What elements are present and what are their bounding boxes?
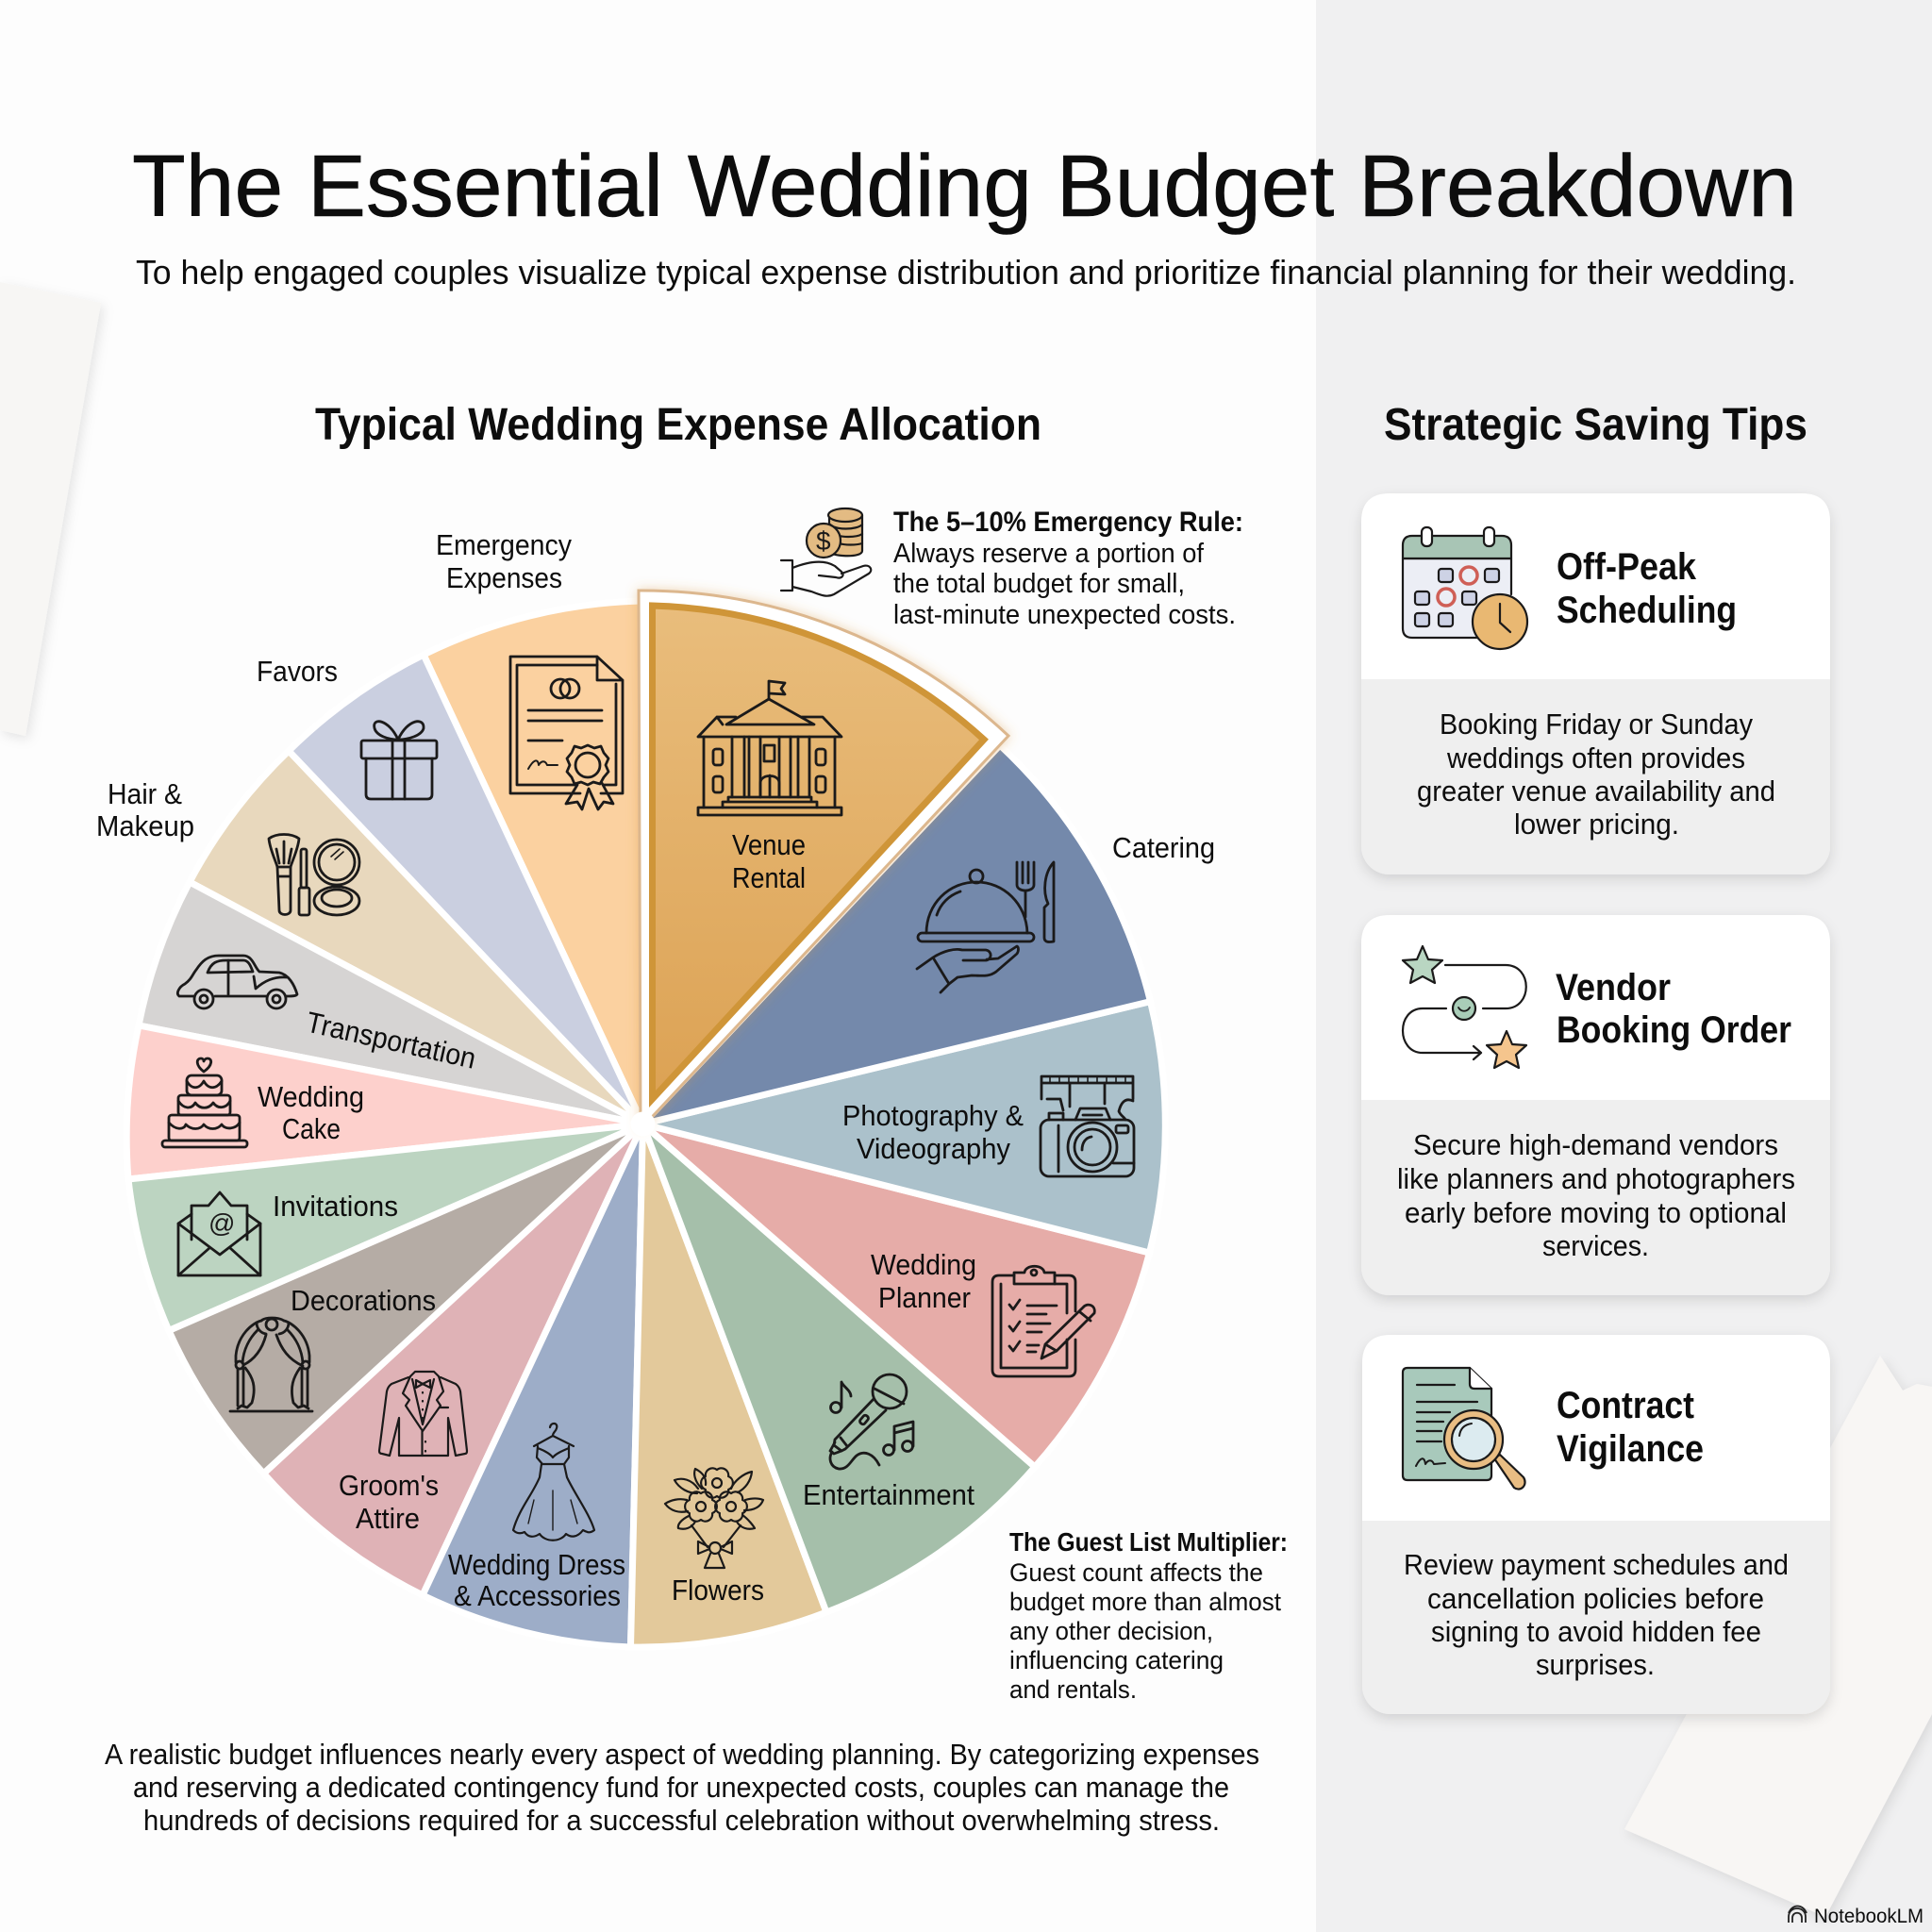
callout: guest list multiplier: Guest count affects the xyxy=(1009,1558,1263,1587)
icon: makeup xyxy=(269,834,359,915)
slice: entertainment xyxy=(643,1124,1035,1612)
label: transportation: Transportation xyxy=(303,1006,479,1075)
icon: invitation envelope xyxy=(178,1192,260,1275)
label: wedding planner xyxy=(871,1248,976,1314)
icon: decorations arch xyxy=(230,1318,312,1411)
slice: favors xyxy=(289,655,643,1124)
card text xyxy=(1417,708,1775,841)
label: hair and makeup xyxy=(96,777,194,842)
card text xyxy=(1404,1548,1789,1681)
label: emergency expenses xyxy=(436,528,572,594)
label: groom's attire: Groom's xyxy=(339,1469,439,1502)
card title: Contract xyxy=(1557,1385,1694,1426)
card title: Vendor xyxy=(1556,967,1671,1008)
icon: vendor path with stars xyxy=(1403,946,1526,1068)
label: hair and makeup: Makeup xyxy=(96,809,194,842)
icon: wedding dress xyxy=(513,1424,594,1541)
icon: bouquet xyxy=(665,1468,763,1568)
card title: Booking Order xyxy=(1557,1009,1791,1051)
panel: off-peak scheduling xyxy=(1361,493,1830,874)
callout: guest list multiplier: influencing catering xyxy=(1009,1646,1224,1674)
icon: venue building xyxy=(698,681,841,815)
footer paragraph xyxy=(105,1738,1259,1837)
label: wedding planner: Wedding xyxy=(871,1248,976,1281)
label: favors: Favors xyxy=(257,655,338,688)
callout: guest list multiplier: The Guest List Multiplier: xyxy=(1009,1527,1288,1557)
label: invitations: Invitations xyxy=(273,1190,398,1223)
paper scrap left xyxy=(0,282,101,736)
callout: emergency rule xyxy=(893,507,1243,630)
card text: greater venue availability and xyxy=(1417,774,1775,808)
title: The Essential Wedding Budget Breakdown xyxy=(132,137,1797,235)
callout: guest list multiplier: budget more than almost xyxy=(1009,1588,1281,1616)
slice: wedding planner xyxy=(643,1124,1149,1467)
icon: invitation envelope: @ xyxy=(208,1208,235,1238)
label: wedding cake: Cake xyxy=(282,1112,341,1145)
callout: emergency rule: last-minute unexpected costs. xyxy=(893,600,1236,630)
card text: signing to avoid hidden fee xyxy=(1431,1615,1761,1648)
icon: coins and hand xyxy=(781,508,871,596)
callout: emergency rule: the total budget for small, xyxy=(893,569,1185,599)
panel: contract vigilance xyxy=(1362,1335,1830,1714)
card title: Scheduling xyxy=(1557,590,1737,631)
label: venue rental: Rental xyxy=(732,861,806,894)
slice: emergency expenses xyxy=(424,601,643,1124)
label: wedding cake: Wedding xyxy=(258,1080,364,1113)
slice: transportation xyxy=(139,882,643,1124)
label: emergency expenses: Emergency xyxy=(436,528,572,561)
subtitle: To help engaged couples visualize typical expense distribution and prioritize financial planning for their wedding. xyxy=(136,253,1796,291)
slice: decorations xyxy=(169,1124,643,1474)
callout: emergency rule: The 5–10% Emergency Rule: xyxy=(893,507,1243,538)
icon: contract and magnifier xyxy=(1403,1368,1525,1490)
label: wedding planner: Planner xyxy=(878,1281,971,1314)
label: groom's attire: Attire xyxy=(356,1502,420,1535)
label: emergency expenses: Expenses xyxy=(446,561,562,594)
label: venue rental xyxy=(732,828,806,894)
card text: lower pricing. xyxy=(1514,808,1679,841)
icon: catering cloche xyxy=(917,862,1054,992)
label: hair and makeup: Hair & xyxy=(108,777,182,810)
card text: services. xyxy=(1542,1229,1649,1262)
icon: marriage certificate xyxy=(510,657,623,809)
label: wedding cake xyxy=(258,1080,364,1145)
label: photography and videography xyxy=(842,1099,1024,1165)
label: photography and videography: Photography & xyxy=(842,1099,1024,1132)
card text: like planners and photographers xyxy=(1397,1162,1795,1195)
slice: photography xyxy=(643,1002,1165,1253)
label: venue rental: Venue xyxy=(732,828,806,861)
icon: tuxedo xyxy=(379,1372,467,1456)
icon: calendar and clock xyxy=(1403,527,1527,649)
card text xyxy=(1397,1128,1795,1262)
footer paragraph: hundreds of decisions required for a successful celebration without overwhelming stress. xyxy=(143,1804,1220,1837)
label: entertainment: Entertainment xyxy=(803,1478,974,1511)
center burst xyxy=(630,1111,655,1136)
card text: cancellation policies before xyxy=(1427,1582,1764,1615)
slice: wedding dress xyxy=(423,1124,643,1647)
callout: guest list multiplier: any other decision, xyxy=(1009,1617,1213,1645)
icon: gift box xyxy=(361,722,437,799)
paper scrap bottom right xyxy=(1624,1356,1932,1917)
card text: Secure high-demand vendors xyxy=(1413,1128,1778,1161)
card text: Review payment schedules and xyxy=(1404,1548,1789,1581)
card title: Vigilance xyxy=(1557,1428,1704,1470)
heading: tips: Strategic Saving Tips xyxy=(1384,400,1807,450)
callout: guest list multiplier: and rentals. xyxy=(1009,1675,1137,1704)
icon: vintage car xyxy=(177,956,297,1008)
label: decorations: Decorations xyxy=(291,1284,436,1317)
icon: clipboard checklist xyxy=(992,1266,1094,1376)
slice: wedding cake xyxy=(126,1025,642,1179)
card text: surprises. xyxy=(1536,1648,1655,1681)
right sidebar panel xyxy=(1316,0,1932,1932)
slice: venue rental highlighted xyxy=(639,591,1008,1129)
label: photography and videography: Videography xyxy=(857,1132,1010,1165)
card title xyxy=(1556,967,1791,1051)
card title xyxy=(1557,1385,1704,1470)
label: groom's attire xyxy=(339,1469,439,1535)
icon: wedding cake xyxy=(162,1058,247,1147)
slice: hair and makeup xyxy=(190,751,643,1124)
slice: invitations xyxy=(128,1124,643,1330)
pie chart xyxy=(126,591,1165,1647)
heading: chart: Typical Wedding Expense Allocation xyxy=(315,400,1041,450)
icon: camera and film xyxy=(1041,1076,1134,1176)
label: wedding dress and accessories: & Accessories xyxy=(454,1579,621,1612)
label: wedding dress and accessories xyxy=(448,1548,625,1612)
label: catering: Catering xyxy=(1112,831,1215,864)
card text: Booking Friday or Sunday xyxy=(1440,708,1753,741)
slice: flowers xyxy=(630,1124,826,1647)
label: flowers: Flowers xyxy=(672,1574,764,1607)
footer paragraph: and reserving a dedicated contingency fund for unexpected costs, couples can manage the xyxy=(133,1771,1229,1804)
icon: microphone and notes xyxy=(830,1374,913,1469)
slice: groom's attire xyxy=(264,1124,643,1595)
label: wedding dress and accessories: Wedding Dress xyxy=(448,1548,625,1581)
notebooklm mark: NotebookLM xyxy=(1814,1906,1924,1927)
callout: emergency rule: Always reserve a portion of xyxy=(893,539,1205,569)
icon: coins and hand: $ xyxy=(816,526,831,556)
card title: Off-Peak xyxy=(1557,546,1697,588)
card text: early before moving to optional xyxy=(1405,1196,1787,1229)
panel: vendor booking order xyxy=(1361,915,1830,1295)
callout: guest list multiplier xyxy=(1009,1527,1288,1704)
card text: weddings often provides xyxy=(1446,741,1745,774)
card title xyxy=(1557,546,1737,631)
slice: catering xyxy=(643,745,1151,1124)
footer paragraph: A realistic budget influences nearly every aspect of wedding planning. By categorizing expenses xyxy=(105,1738,1259,1771)
